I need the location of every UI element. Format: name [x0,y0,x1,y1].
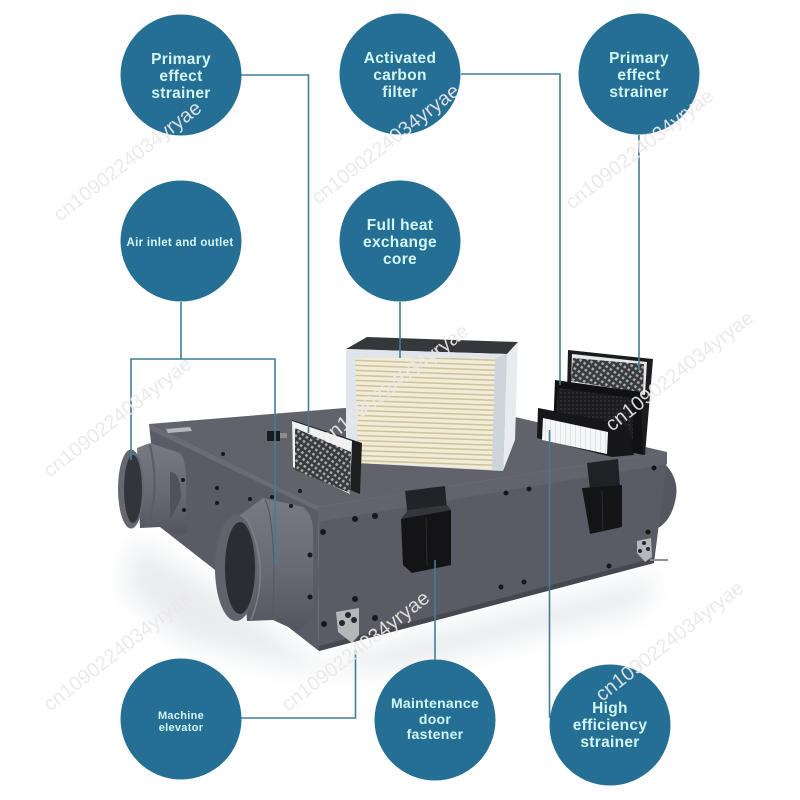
left face of housing [149,424,319,651]
callout: full heat exchange core: Full heat [367,217,433,234]
left duct [118,443,187,535]
elevator bracket right [637,538,668,562]
housing bolts [181,452,656,627]
front face of housing [318,452,667,651]
watermarks: cn1090224034yryae [317,320,473,449]
callout: high efficiency strainer: strainer [580,734,640,751]
back primary filter [566,350,653,455]
callout: air inlet and outlet: Air inlet and outlet [127,237,233,249]
callout: primary effect strainer left: effect [159,68,203,85]
callout: activated carbon filter: carbon [373,67,427,84]
left primary filter [292,420,362,494]
watermarks: cn1090224034yryae [602,307,758,436]
elevator bracket front [336,608,359,643]
callout: maintenance door fastener: Maintenance [391,695,479,711]
callout: full heat exchange core: exchange [363,234,437,251]
callout: primary effect strainer right: effect [617,67,661,84]
front lower edge [319,558,654,651]
top knob [267,431,280,441]
product: ventilation unit [118,337,676,651]
callout: high efficiency strainer [550,664,670,786]
activated carbon filter [553,380,643,455]
callout: high efficiency strainer: efficiency [573,717,647,734]
callout: maintenance door fastener: fastener [407,726,464,742]
callout: maintenance door fastener [374,660,496,780]
watermarks: cn1090224034yryae [50,97,206,226]
watermarks: cn1090224034yryae [40,353,196,482]
front face top band [318,452,667,522]
callout: primary effect strainer right [578,14,700,134]
callout: full heat exchange core: core [383,251,417,268]
callout: machine elevator [120,658,242,780]
high efficiency filter [537,408,634,457]
watermarks: cn1090224034yryae [562,85,718,214]
callout: maintenance door fastener: door [419,711,451,727]
heat exchange core [346,337,518,471]
watermarks [40,80,758,716]
top label plate [166,427,192,433]
door latch left [401,486,451,573]
callout: primary effect strainer right: Primary [609,50,669,67]
floor shadow [125,540,660,670]
connector lines [131,74,639,718]
callout: activated carbon filter: filter [382,84,418,101]
callout: primary effect strainer left: strainer [151,85,211,102]
watermarks: cn1090224034yryae [278,587,434,716]
callout: machine elevator: elevator [159,722,204,734]
top face of housing [149,408,667,507]
callout: air inlet and outlet [120,180,242,302]
callout: high efficiency strainer: High [592,700,628,717]
callout: full heat exchange core [340,180,460,302]
front duct [215,498,313,631]
watermarks: cn1090224034yryae [592,577,748,706]
callout: activated carbon filter [340,14,460,134]
far-side duct [658,463,676,528]
door latch right [582,459,622,534]
watermarks: cn1090224034yryae [308,80,464,209]
callout: machine elevator: Machine [158,710,204,722]
callout: primary effect strainer right: strainer [609,84,669,101]
callout: primary effect strainer left [120,14,242,136]
callout: primary effect strainer left: Primary [151,51,211,68]
callout: activated carbon filter: Activated [364,50,436,67]
watermarks: cn1090224034yryae [40,587,196,716]
